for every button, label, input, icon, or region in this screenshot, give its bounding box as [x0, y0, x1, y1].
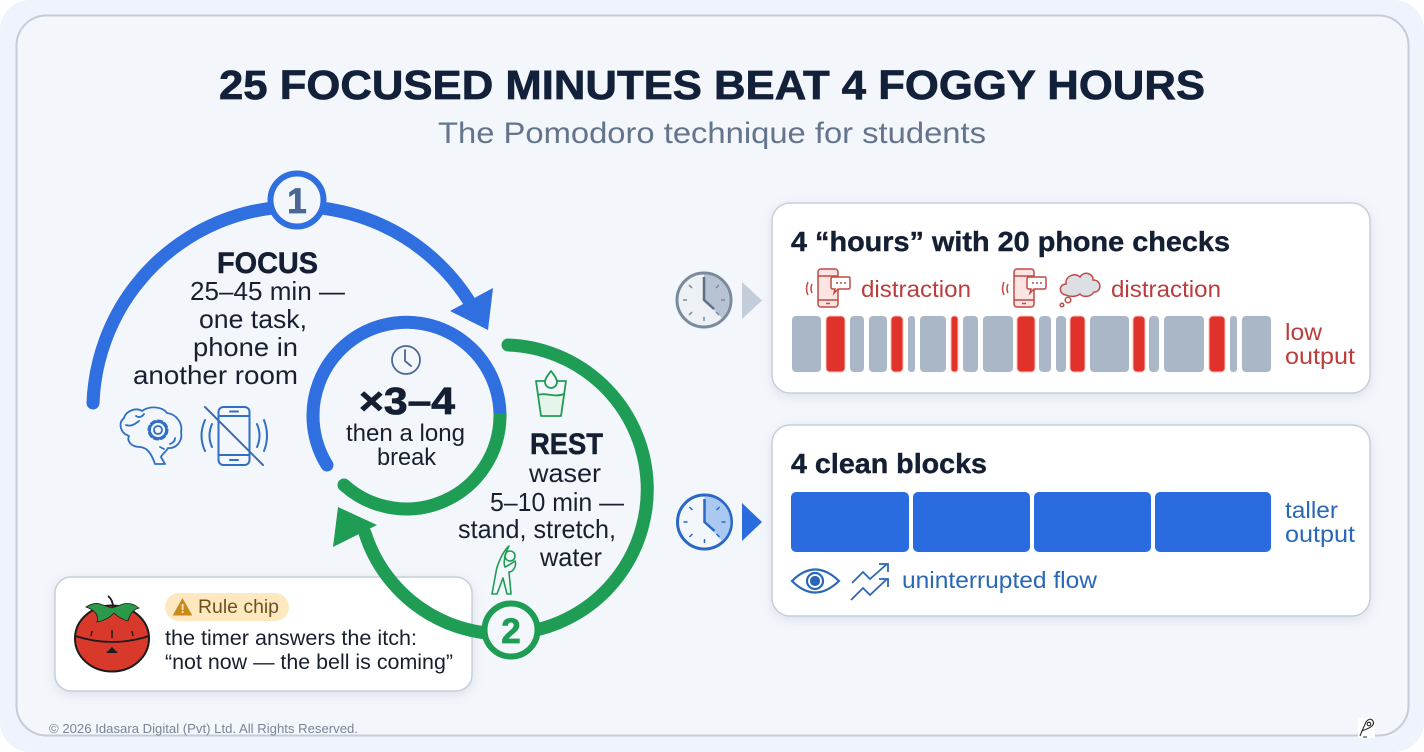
low output label: output: [1285, 343, 1356, 369]
icon: rising trend arrows: [851, 564, 888, 600]
low output label: low: [1285, 319, 1322, 345]
icon: small clock: [392, 346, 420, 374]
step badge 1: [270, 174, 324, 226]
rule chip label: Rule chip: [198, 597, 279, 618]
clean time blocks: [791, 492, 1271, 552]
rule chip label: [165, 593, 289, 621]
icon: blue clock: [678, 495, 732, 549]
icon: grey clock: [677, 273, 731, 327]
arrow: grey triangle: [742, 282, 762, 319]
icon: phone distraction 1: [806, 269, 850, 307]
focus text block: phone in: [193, 332, 298, 362]
icon: phone distraction 2: [1002, 269, 1046, 307]
inner cycle ring: [313, 322, 500, 509]
taller output label: [1285, 497, 1356, 547]
heading: distracted: 4 “hours” with 20 phone checks: [791, 226, 1230, 257]
focus text block: one task,: [199, 304, 307, 334]
focus text block: another room: [133, 360, 298, 390]
taller output label: output: [1285, 521, 1356, 547]
focus text block: [133, 247, 345, 390]
rest text block: 5–10 min —: [490, 487, 624, 517]
step badge 1: 1: [287, 182, 307, 221]
rest text block: stand, stretch,: [458, 514, 616, 544]
uninterrupted flow label: uninterrupted flow: [902, 567, 1097, 593]
taller output label: taller: [1285, 497, 1338, 523]
rest text block: waser: [528, 458, 601, 488]
rest text block: REST: [530, 428, 603, 461]
copyright: © 2026 Idasara Digital (Pvt) Ltd. All Rights Reserved.: [49, 722, 358, 736]
icon: tomato timer: [75, 596, 149, 672]
focus arc with arrow: [93, 207, 493, 403]
distraction label 1: distraction: [861, 276, 971, 302]
rest text block: [458, 428, 624, 572]
rule text: the timer answers the itch:: [165, 627, 417, 650]
icon: silenced phone: [202, 407, 267, 465]
rule chip card: [55, 577, 472, 691]
step badge 2: [484, 604, 538, 656]
center repeat text: then a long: [346, 420, 465, 447]
center repeat text: ×3–4: [359, 381, 455, 423]
low output label: [1285, 319, 1356, 369]
icon: glass of water: [536, 371, 566, 416]
title: 25 FOCUSED MINUTES BEAT 4 FOGGY HOURS: [219, 62, 1205, 108]
icon: stretching figure: [492, 546, 516, 594]
icon: pen nib watermark: [1358, 718, 1375, 738]
focus text block: FOCUS: [217, 247, 318, 280]
panel: distracted hours: [772, 203, 1370, 393]
center repeat text: [346, 346, 465, 471]
rest text block: water: [539, 542, 602, 572]
distraction label 2: distraction: [1111, 276, 1221, 302]
subtitle: The Pomodoro technique for students: [438, 117, 986, 150]
rest arc with arrow: [333, 345, 647, 634]
icon: eye: [792, 570, 839, 592]
fragmented time bar: [792, 316, 1271, 372]
panel: clean blocks: [772, 425, 1370, 616]
icon: brain with gear: [121, 407, 181, 464]
arrow: blue triangle: [742, 503, 762, 541]
center repeat text: break: [377, 444, 437, 471]
rule text: “not now — the bell is coming”: [165, 651, 453, 674]
step badge 2: 2: [501, 612, 521, 651]
focus text block: 25–45 min —: [190, 276, 345, 306]
rule text: [165, 627, 453, 674]
icon: thought cloud: [1060, 273, 1100, 307]
heading: clean blocks: 4 clean blocks: [791, 448, 987, 479]
